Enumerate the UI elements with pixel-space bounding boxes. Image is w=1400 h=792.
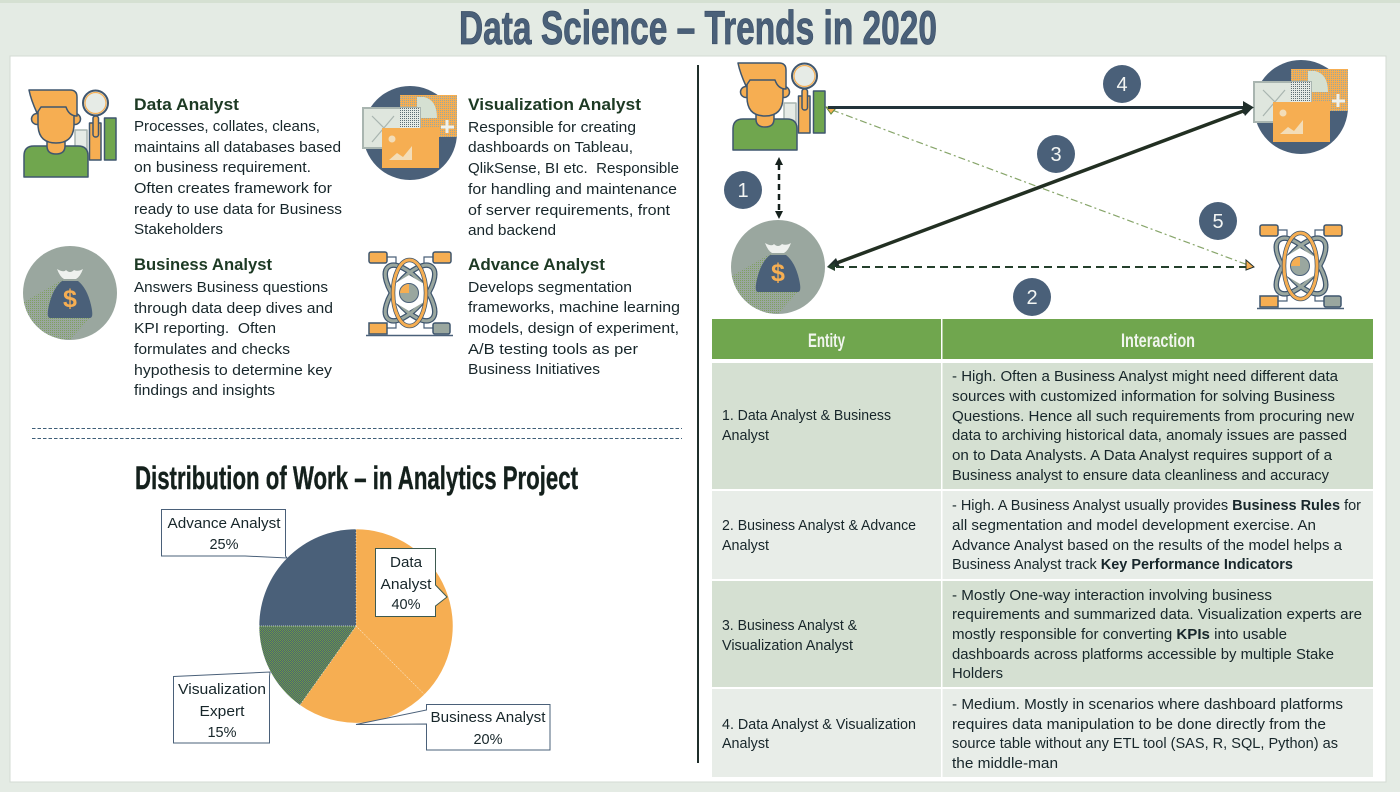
text: data analyst: on business requirement. [134,159,311,176]
row 3: dashboards across platforms accessible by multiple Stake [952,647,1334,663]
text: visualization analyst: dashboards on Tableau, [468,139,633,156]
text: visualization analyst: Responsible for creating [468,119,636,136]
row 1: Business analyst to ensure data cleanliness and accuracy [952,468,1330,484]
callout: visualization expert [174,672,270,743]
icon: business analyst node [718,220,825,319]
row 4 [712,689,1373,777]
callout: data analyst: Analyst [380,576,432,593]
callout: advance analyst: 25% [210,536,238,553]
badge 5 [1199,202,1237,240]
text: visualization analyst [468,95,679,239]
row 1: 1. Data Analyst & Business [722,408,891,424]
icon: business analyst [10,246,117,345]
row 4: 4. Data Analyst & Visualization [722,717,916,733]
row 3: mostly responsible for converting KPIs into usable [952,627,1287,643]
row 2 [712,491,1373,579]
table header: Interaction [1121,331,1195,352]
heading: distribution of work: Distribution of Work – in Analytics Project [135,460,578,496]
icon: data analyst [24,90,116,177]
row 1: - High. Often a Business Analyst might need different data [952,369,1339,385]
badge 2: 2 [1026,287,1038,309]
row 3: 3. Business Analyst & [722,618,857,634]
row 1: data to archiving historical data, anomaly issues are passed [952,428,1347,444]
callout: visualization expert: Visualization [178,681,266,698]
arrow 5: data analyst to advance analyst [826,107,1254,270]
text: business analyst: KPI reporting. Often [134,320,276,337]
text: advance analyst: frameworks, machine learning [468,299,680,316]
text: business analyst: through data deep dives and [134,300,333,317]
row 4: source table without any ETL tool (SAS, R, SQL, Python) as [952,736,1338,752]
row 2: all segmentation and model development exercise. An [952,518,1316,534]
interaction diagram [718,60,1348,319]
text: business analyst: hypothesis to determine key [134,362,333,379]
row 2: Advance Analyst based on the results of the model helps a [952,538,1343,554]
text: business analyst [134,255,333,399]
badge 1: 1 [737,180,749,202]
row 4: - Medium. Mostly in scenarios where dashboard platforms [952,697,1343,713]
vertical divider [697,65,699,763]
text: visualization analyst: QlikSense, BI etc. Responsible [468,160,679,177]
row 3: - Mostly One-way interaction involving business [952,588,1272,604]
arrow 3: business analyst to visualization analyst [827,106,1253,267]
row 1: Questions. Hence all such requirements from procuring new [952,409,1354,425]
row 3: Visualization Analyst [722,638,853,654]
text: data analyst: Stakeholders [134,221,223,238]
row 3: requirements and summarized data. Visualization experts are [952,607,1362,623]
callout: data analyst: 40% [392,596,420,613]
text: visualization analyst: of server requirements, front [468,202,671,219]
slice: business analyst [300,626,424,723]
text: advance analyst: A/B testing tools as per [468,341,638,358]
row 1: on to Data Analysts. A Data Analyst requires support of a [952,448,1333,464]
text: business analyst: formulates and checks [134,341,290,358]
callout: business analyst: 20% [474,731,502,748]
pie chart [259,529,453,723]
icon: visualization analyst [363,86,457,180]
arrow 1: data analyst to business analyst [775,157,783,219]
text: visualization analyst: and backend [468,222,556,239]
text: business analyst: Business Analyst [134,255,272,274]
callout: advance analyst: Advance Analyst [168,515,281,532]
callout: business analyst: Business Analyst [430,709,546,726]
badge 4: 4 [1116,74,1128,96]
row 3: Holders [952,666,1003,682]
text: data analyst: Processes, collates, cleans, [134,118,320,135]
text: data analyst [134,95,342,238]
text: business analyst: findings and insights [134,382,275,399]
callout: data analyst: Data [390,554,423,571]
icon: advance analyst [366,252,453,336]
row 2: - High. A Business Analyst usually provides Business Rules for [952,498,1361,514]
text: advance analyst [468,255,680,378]
row 1: sources with customized information for solving Business [952,389,1335,405]
row 1 [712,363,1373,489]
callout: business analyst [356,704,550,750]
arrow 4: data analyst to visualization analyst [828,101,1254,114]
table header [712,319,1373,359]
text: advance analyst: Develops segmentation [468,279,632,296]
row 4: the middle-man [952,756,1058,772]
text: data analyst: ready to use data for Business [134,201,342,218]
text: visualization analyst: Visualization Analyst [468,95,641,114]
icon: advance analyst node [1257,225,1344,308]
panel: role descriptions [10,86,680,399]
title: Data Science – Trends in 2020 [459,1,937,54]
text: data analyst: maintains all databases based [134,139,341,156]
badge 4 [1103,65,1141,103]
row 4: Analyst [722,736,769,752]
table header: Entity [808,331,845,352]
text: advance analyst: Advance Analyst [468,255,605,274]
badge 3 [1037,135,1075,173]
callout: visualization expert: Expert [200,703,245,720]
icon: visualization analyst node [1254,60,1348,154]
arrow 2: business analyst to advance analyst [827,263,1246,271]
callout: data analyst [376,548,447,616]
row 4: requires data manipulation to be done directly from the [952,717,1326,733]
badge 3: 3 [1050,144,1062,166]
text: data analyst: Often creates framework for [134,180,332,197]
table: entity interactions [712,319,1373,777]
text: visualization analyst: for handling and maintenance [468,181,677,198]
icon: data analyst node [733,63,825,150]
text: advance analyst: models, design of experiment, [468,320,679,337]
slice: data analyst [356,529,453,694]
slice: advance analyst [259,529,356,626]
row 2: Business Analyst track Key Performance Indicators [952,557,1293,573]
badge 2 [1013,278,1051,316]
callout: advance analyst [162,510,287,558]
text: business analyst: Answers Business questions [134,279,328,296]
text: data analyst: Data Analyst [134,95,239,114]
callout: visualization expert: 15% [208,724,236,741]
slice: visualization expert [259,626,356,705]
text: advance analyst: Business Initiatives [468,361,600,378]
row 2: 2. Business Analyst & Advance [722,518,916,534]
row 3 [712,581,1373,687]
row 1: Analyst [722,428,769,444]
row 2: Analyst [722,538,769,554]
badge 1 [724,171,762,209]
badge 5: 5 [1212,211,1224,233]
